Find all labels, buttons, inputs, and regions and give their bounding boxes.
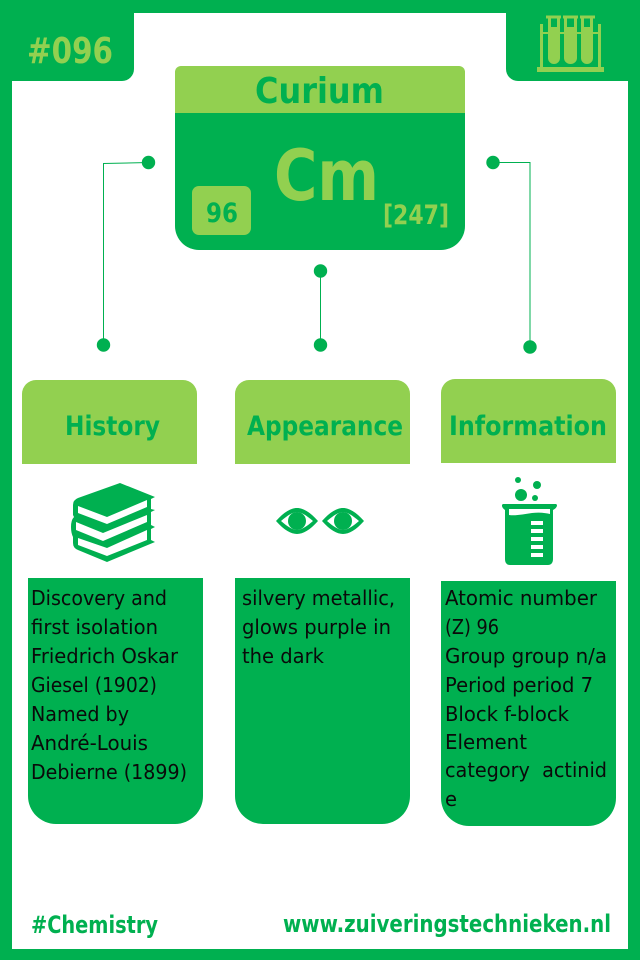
- panel: information text: e: [445, 787, 457, 811]
- panel: appearance text: glows purple in: [242, 615, 391, 639]
- tab: element number: [0, 0, 134, 81]
- panel: information text: (Z) 96: [445, 615, 499, 639]
- tab: element number: #096: [27, 31, 113, 72]
- card header: [175, 66, 465, 113]
- icon: beaker: [502, 477, 557, 565]
- panel: history text: André-Louis: [31, 731, 148, 755]
- card body: [175, 113, 465, 250]
- footer hashtag: #Chemistry: [31, 911, 158, 939]
- icon: left eye: [276, 508, 318, 534]
- atomic number badge: 96: [206, 198, 238, 229]
- panel: information text: Period period 7: [445, 673, 593, 697]
- panel: history text: [28, 578, 203, 824]
- connector: appearance: [314, 264, 327, 352]
- heading: appearance: Appearance: [247, 411, 403, 442]
- panel: history text: Friedrich Oskar: [31, 644, 179, 668]
- heading: history: History: [65, 411, 160, 442]
- tab: test tubes icon: [506, 0, 640, 81]
- atomic mass: [247]: [383, 200, 449, 231]
- icon: right eye: [322, 508, 364, 534]
- panel: history text: first isolation: [31, 615, 158, 639]
- panel: history text: Named by: [31, 702, 129, 726]
- panel: information text: Block f-block: [445, 702, 569, 726]
- connector: information: [486, 156, 537, 354]
- icon: test tubes: [537, 16, 604, 72]
- panel: history text: Discovery and: [31, 586, 167, 610]
- heading: history: [22, 380, 197, 464]
- element card: [175, 66, 465, 250]
- panel: history text: Giesel (1902): [31, 673, 157, 697]
- panel: appearance text: [235, 578, 410, 824]
- panel: appearance text: the dark: [242, 644, 324, 668]
- icon: eyes: [276, 508, 364, 534]
- panel: appearance text: silvery metallic,: [242, 586, 395, 610]
- panel: information text: category actinid: [445, 758, 607, 782]
- icon: books: [71, 483, 155, 562]
- element symbol: Cm: [274, 135, 379, 217]
- connector: history: [97, 156, 155, 352]
- panel: information text: Group group n/a: [445, 644, 607, 668]
- heading: appearance: [235, 380, 410, 464]
- panel: information text: [441, 581, 616, 826]
- element name: Curium: [255, 71, 384, 112]
- atomic number badge: [192, 186, 251, 235]
- heading: information: [441, 379, 616, 463]
- panel: information text: Atomic number: [445, 586, 598, 610]
- heading: information: Information: [449, 411, 607, 442]
- panel: information text: Element: [445, 730, 527, 754]
- panel: history text: Debierne (1899): [31, 760, 187, 784]
